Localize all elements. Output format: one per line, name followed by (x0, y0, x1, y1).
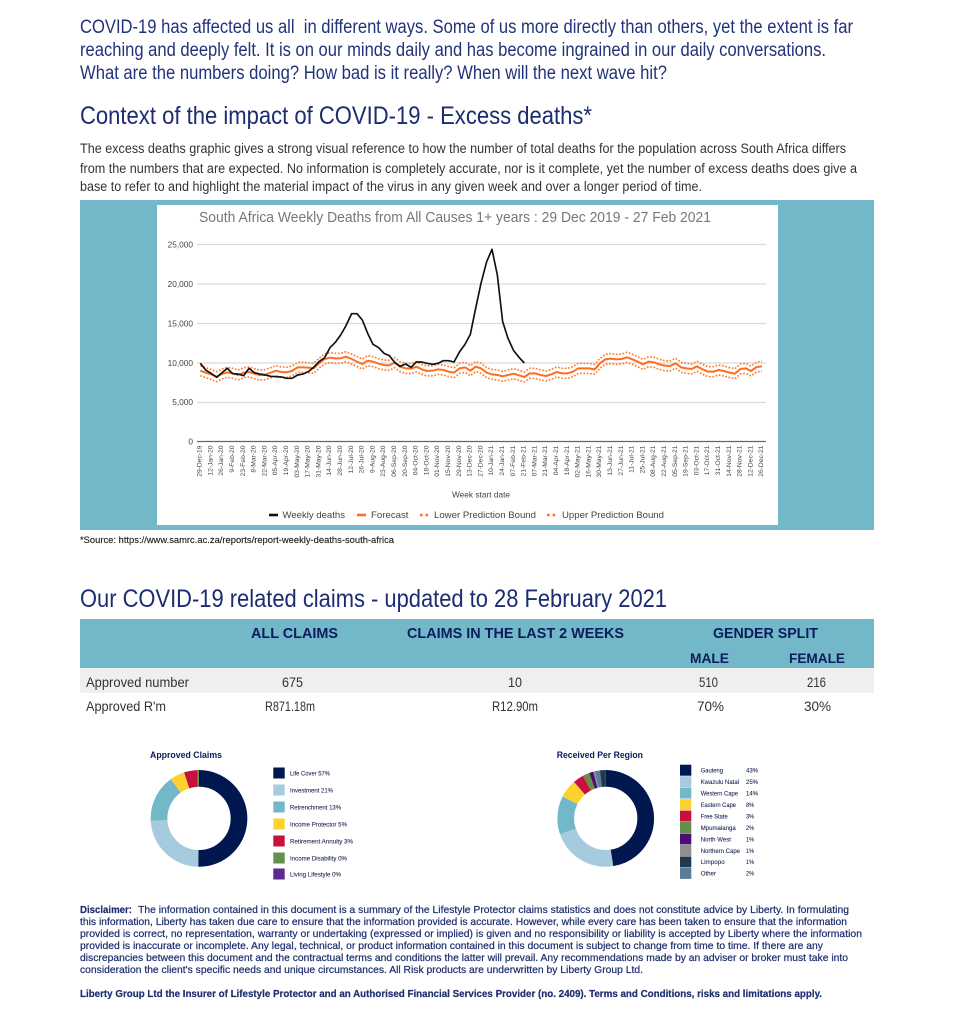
table headers: CLAIMS IN THE LAST 2 WEEKS (407, 625, 624, 642)
x axis date labels: 23-Feb-20 (240, 445, 247, 476)
x axis date labels: 26-Jan-20 (218, 445, 225, 476)
region legend: 8% (746, 802, 754, 809)
x axis date labels: 26-Dec-21 (758, 445, 765, 477)
row: approved number: 675 (282, 674, 303, 690)
panel: received per region donut (557, 750, 758, 879)
source note: *Source: https://www.samrc.ac.za/reports/report-weekly-deaths-south-africa (80, 535, 395, 546)
region legend: 14% (746, 790, 758, 797)
donut legend: Retirement Annuity 3% (290, 838, 353, 846)
chart legend: Weekly deaths (282, 510, 345, 521)
donut legend: Income Disability 0% (290, 856, 347, 862)
donut legend (273, 768, 353, 880)
x axis date labels: 26-Jul-20 (359, 445, 366, 473)
x axis date labels: 02-May-21 (575, 445, 582, 477)
intro text: reaching and deeply felt. It is on our minds daily and has become ingrained in our daily conversations. (80, 40, 826, 61)
donut chart (159, 778, 239, 858)
y axis labels: 15,000 (168, 318, 193, 328)
region legend: Gauteng (701, 768, 723, 774)
chart title: South Africa Weekly Deaths from All Causes 1+ years : 29 Dec 2019 - 27 Feb 2021 (199, 210, 711, 226)
x axis date labels: 05-Apr-20 (272, 445, 279, 475)
region legend: Free State (701, 813, 728, 820)
x axis date labels: 07-Mar-21 (531, 445, 538, 476)
row: approved number: Approved number (86, 674, 189, 690)
x axis date labels: 23-Aug-20 (380, 445, 387, 477)
x axis date labels: 25-Jul-21 (639, 445, 646, 473)
x axis date labels: 8-Mar-20 (251, 445, 258, 473)
donut legend: Life Cover 57% (290, 770, 330, 778)
x axis date labels: 22-Mar-20 (261, 445, 268, 476)
footer: authorised provider statement: Liberty Group Ltd the Insurer of Lifestyle Protector and an Authorised Financial Services Provider (no. 2409). Terms and Conditions, risks and limitations apply. (80, 988, 822, 1000)
x axis date labels: 9-Feb-20 (229, 445, 236, 473)
x axis date labels: 29-Nov-20 (456, 445, 463, 477)
x axis date labels: 10-Jan-21 (488, 445, 495, 476)
region legend: 1% (746, 859, 754, 866)
x axis date labels: 19-Apr-20 (283, 445, 290, 475)
paragraph: excess deaths explanation (80, 141, 857, 194)
disclaimer: provided is inaccurate or incomplete. Any legal, technical, or product information contained in this document is subject to change from time to time. If there are any (80, 940, 824, 952)
heading: context of the impact: Context of the impact of COVID-19 - Excess deaths* (80, 102, 592, 130)
x axis date labels: 22-Aug-21 (661, 445, 668, 477)
row: approved R'm (86, 698, 831, 714)
x axis date labels: 04-Apr-21 (553, 445, 560, 475)
region legend: North West (701, 836, 731, 843)
claims table (80, 619, 874, 714)
chart legend: Forecast (371, 510, 409, 521)
data lines (200, 249, 762, 382)
x axis date labels: 17-May-20 (305, 445, 312, 477)
x axis date labels: 20-Sep-20 (402, 445, 409, 477)
x axis date labels: 04-Oct-20 (413, 445, 420, 475)
intro text (80, 17, 854, 84)
x axis date labels: 06-Sep-20 (391, 445, 398, 477)
y axis labels: 0 (188, 436, 193, 446)
x axis date labels: 14-Jun-20 (326, 445, 333, 476)
x axis date labels: 15-Nov-20 (445, 445, 452, 477)
x axis date labels: 01-Nov-20 (434, 445, 441, 477)
y axis labels: 25,000 (168, 240, 193, 250)
x axis date labels: 9-Aug-20 (369, 445, 376, 473)
donut legend: Retrenchment 13% (290, 804, 341, 812)
x axis date labels: 27-Jun-21 (618, 445, 625, 476)
region legend: 25% (746, 779, 758, 786)
y axis labels: 10,000 (168, 358, 193, 368)
x axis date labels: 21-Feb-21 (521, 445, 528, 476)
donut title: Received Per Region (557, 750, 643, 760)
donut title: Approved Claims (150, 750, 222, 760)
x axis date labels: 03-May-20 (294, 445, 301, 477)
x axis date labels: 11-Jul-21 (629, 445, 636, 473)
x axis date labels: 31-May-20 (315, 445, 322, 477)
table headers: GENDER SPLIT (713, 625, 818, 642)
donut legend: Income Protector 5% (290, 822, 347, 828)
region legend: Kwazulu Natal (701, 779, 739, 786)
intro text: COVID-19 has affected us all in different ways. Some of us more directly than others, yet the extent is far (80, 17, 854, 38)
row: approved number: 10 (508, 674, 522, 690)
heading: covid-19 related claims: Our COVID-19 related claims - updated to 28 February 2021 (80, 585, 667, 613)
donut chart (566, 778, 646, 858)
x axis date labels: 16-May-21 (585, 445, 592, 477)
x axis date labels (197, 445, 765, 477)
weekly deaths line (200, 249, 524, 378)
region legend: Limpopo (701, 859, 725, 866)
x axis date labels: 30-May-21 (596, 445, 603, 477)
row: approved number: 510 (699, 674, 718, 690)
x axis date labels: 27-Dec-20 (477, 445, 484, 477)
region legend (680, 765, 758, 879)
region legend: 43% (746, 768, 758, 774)
region legend: Mpumalanga (701, 825, 736, 832)
row: approved number: 216 (807, 674, 826, 690)
disclaimer: Disclaimer: (80, 904, 132, 916)
x axis date labels: 08-Aug-21 (650, 445, 657, 477)
panel: approved claims donut (150, 750, 353, 880)
x axis date labels: 13-Jun-21 (607, 445, 614, 476)
y axis labels: 20,000 (168, 279, 193, 289)
x axis date labels: 17-Oct-21 (704, 445, 711, 475)
paragraph: excess deaths explanation: The excess deaths graphic gives a strong visual reference to how the number of total deaths for the population across South Africa differs (80, 141, 846, 156)
upper prediction bound (200, 352, 762, 372)
disclaimer: this information, Liberty has taken due care to ensure that the information provided is accurate. However, while every care has been taken to ensure that the information (80, 916, 847, 928)
paragraph: excess deaths explanation: from the numbers that are expected. No information is completely accurate, nor is it complete, yet the number of excess deaths does give a (80, 161, 857, 176)
region legend: Eastern Cape (701, 802, 736, 809)
x axis date labels: 12-Jul-20 (348, 445, 355, 473)
x axis date labels: 31-Oct-21 (715, 445, 722, 475)
disclaimer (80, 904, 862, 976)
lower prediction bound (200, 362, 762, 382)
row: approved number (86, 674, 826, 690)
paragraph: excess deaths explanation: base to refer to and highlight the material impact of the virus in any given week and over a longer period of time. (80, 179, 702, 194)
region legend: 2% (746, 825, 754, 832)
row: approved R'm: Approved R'm (86, 698, 166, 714)
table headers: MALE (690, 650, 729, 666)
row: approved R'm: 30% (804, 698, 831, 714)
x axis date labels: 19-Sep-21 (683, 445, 690, 477)
x axis date labels: 14-Nov-21 (726, 445, 733, 477)
table headers: ALL CLAIMS (251, 625, 338, 642)
chart legend (269, 510, 664, 521)
row: approved R'm: R871.18m (265, 698, 315, 714)
x axis date labels: 12-Jan-20 (207, 445, 214, 476)
x axis date labels: 03-Oct-21 (693, 445, 700, 475)
x axis title: Week start date (452, 490, 510, 500)
x axis date labels: 05-Sep-21 (672, 445, 679, 477)
disclaimer: provided is correct, no representation, warranty or undertaking (expressed or implied) is given and no responsibility or liability is accepted by Liberty where the information (80, 928, 862, 940)
panel: weekly deaths chart (80, 200, 874, 530)
forecast line (200, 357, 762, 377)
x axis date labels: 13-Dec-20 (467, 445, 474, 477)
table headers (251, 625, 845, 666)
region legend: 1% (746, 848, 754, 855)
chart legend: Lower Prediction Bound (434, 510, 536, 521)
x axis date labels: 24-Jan-21 (499, 445, 506, 476)
x axis date labels: 18-Oct-20 (423, 445, 430, 475)
intro text: What are the numbers doing? How bad is it really? When will the next wave hit? (80, 63, 667, 84)
x axis date labels: 07-Feb-21 (510, 445, 517, 476)
region legend: 2% (746, 871, 754, 878)
x axis date labels: 29-Dec-19 (197, 445, 204, 477)
y axis labels (168, 240, 193, 446)
region legend: Western Cape (701, 790, 738, 797)
region legend: Northern Cape (701, 848, 740, 855)
x axis date labels: 12-Dec-21 (747, 445, 754, 477)
x axis date labels: 21-Mar-21 (542, 445, 549, 476)
donut legend: Investment 21% (290, 788, 333, 794)
table headers: FEMALE (789, 650, 845, 666)
y axis labels: 5,000 (172, 397, 193, 407)
donut legend: Living Lifestyle 0% (290, 872, 341, 878)
x axis date labels: 28-Jun-20 (337, 445, 344, 476)
region legend: 3% (746, 813, 754, 820)
region legend: 1% (746, 836, 754, 843)
region legend: Other (701, 871, 717, 878)
x axis date labels: 28-Nov-21 (737, 445, 744, 477)
chart legend: Upper Prediction Bound (562, 510, 664, 521)
row: approved R'm: 70% (697, 698, 724, 714)
x axis date labels: 18-Apr-21 (564, 445, 571, 475)
disclaimer: The information contained in this document is a summary of the Lifestyle Protector claims statistics and does not constitute advice by Liberty. In formulating (138, 904, 849, 916)
disclaimer: consideration the client's specific needs and unique circumstances. All Risk products are underwritten by Liberty Group Ltd. (80, 964, 643, 976)
row: approved R'm: R12.90m (492, 698, 538, 714)
disclaimer: discrepancies between this document and the contractual terms and conditions the latter will prevail. Any recommendations made by an adviser or broker must take into (80, 952, 848, 964)
